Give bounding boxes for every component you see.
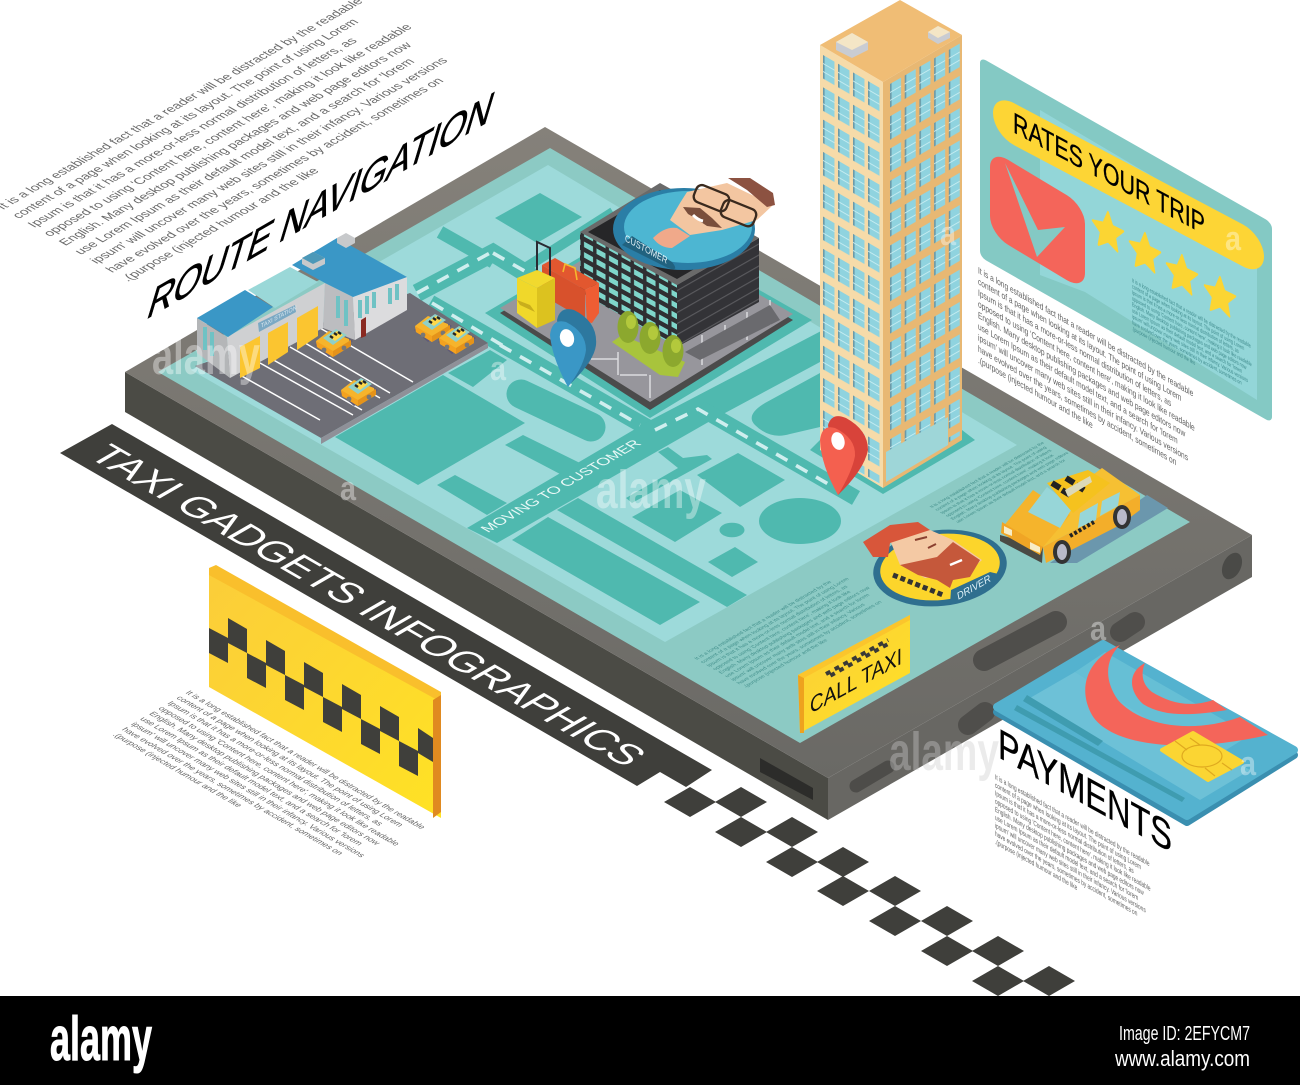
watermarks: a bbox=[1240, 745, 1257, 783]
image id: Image ID: 2EFYCM7 bbox=[1119, 1023, 1250, 1045]
website: www.alamy.com bbox=[1114, 1046, 1250, 1071]
panel small text: have evolved over the years, sometimes by accident, sometimes on bbox=[1132, 319, 1242, 387]
handle bbox=[537, 242, 550, 278]
screen small text: near call taxi: It is a long established fact that a reader will be distracted by the bbox=[694, 580, 834, 661]
watermarks: a bbox=[1225, 220, 1242, 258]
screen small text: near call taxi: ipsum' will uncover many web sites still in their infancy. Various bbox=[730, 603, 867, 682]
screen small text: near call taxi bbox=[694, 572, 896, 689]
roof checks bbox=[1052, 478, 1084, 495]
title band bbox=[60, 424, 712, 787]
roof bbox=[1047, 470, 1110, 513]
garage doors bbox=[240, 336, 260, 378]
card chip bbox=[1162, 733, 1242, 780]
base plaza bbox=[500, 230, 793, 410]
driver badge bbox=[863, 522, 1011, 613]
screen small text: near car: opposed to using 'Content here, content here', making it look bbox=[944, 453, 1055, 518]
city blocks bbox=[335, 375, 525, 485]
road: moving to customer bbox=[467, 330, 823, 543]
checks bbox=[893, 575, 943, 595]
hood bbox=[1002, 490, 1070, 547]
panel small text: opposed to using 'Content here, content here', making it look like readable bbox=[1132, 295, 1252, 369]
road: upper bbox=[417, 253, 545, 293]
building walls bbox=[197, 318, 230, 378]
taxi plate lorem text bbox=[111, 689, 430, 873]
screen small text: near call taxi: English. Many desktop publishing packages and web page editors now bbox=[718, 586, 872, 675]
yellow taxi bbox=[1000, 468, 1168, 564]
device speaker bbox=[760, 758, 813, 800]
rating lorem text: content of a page when looking at its layout. The point of using Lorem bbox=[978, 275, 1181, 403]
tick bbox=[1005, 163, 1065, 257]
payments lorem text: content of a page when looking at its layout. The point of using Lorem bbox=[995, 781, 1141, 872]
title text: TAXI GADGETS INFOGRAPHICS bbox=[79, 439, 656, 772]
stars bbox=[1093, 207, 1235, 319]
rating panel bbox=[980, 57, 1272, 423]
taxi plate lorem text: content of a page when looking at its layout. The point of using Lorem bbox=[174, 694, 406, 828]
screen small text: near call taxi: use Lorem Ipsum as their default model text, and a search for lorem bbox=[724, 593, 872, 679]
screen small text: near call taxi: have evolved over the years, sometimes by accident, sometimes on bbox=[736, 600, 884, 686]
rates your trip text: RATES YOUR TRIP bbox=[1013, 106, 1205, 241]
screen small text: near car: Ipsum is that it has a more-or-less normal distribution of letters bbox=[939, 448, 1053, 515]
tower bbox=[810, 0, 975, 494]
payments lorem text: have evolved over the years, sometimes by accident, sometimes on bbox=[995, 830, 1138, 919]
panel small text: use Lorem Ipsum as their default model text, and a search for 'lorem bbox=[1132, 307, 1242, 376]
rating lorem text: use Lorem Ipsum as their default model text, and a search for 'lorem bbox=[978, 320, 1178, 446]
sign checks bbox=[826, 640, 888, 678]
trees and lawn bbox=[612, 311, 685, 377]
parking lot bbox=[195, 293, 488, 438]
luggage bbox=[517, 242, 599, 328]
taxi plate lorem text: opposed to using 'Content here, content here', making it look like readable bbox=[156, 705, 403, 847]
panel small text: .(purpose (injected humour and the like bbox=[1132, 325, 1195, 368]
screen small text: near call taxi: content of a page when looking at its layout. The point of using Lorem bbox=[700, 577, 851, 665]
card stripes bbox=[1023, 695, 1103, 746]
roof vents bbox=[302, 233, 355, 270]
headlights bbox=[1004, 526, 1040, 553]
checker strip bbox=[664, 787, 1075, 996]
rating lorem text: opposed to using 'Content here, content here', making it look like readable bbox=[978, 298, 1195, 434]
taxi station bbox=[195, 233, 488, 444]
taxi plate lorem text: It is a long established fact that a reader will be distracted by the readable bbox=[183, 689, 428, 831]
station sign: TAXI STATION bbox=[261, 305, 297, 330]
device screen bbox=[158, 148, 1190, 743]
parking lines bbox=[240, 328, 413, 420]
customer badge: CUSTOMER bbox=[625, 233, 667, 267]
payments lorem text: Ipsum is that it has a more-or-less normal distribution of letters, as bbox=[995, 790, 1134, 876]
screen small text: near call taxi: Ipsum is that it has a more-or-less normal distribution of letters, as bbox=[706, 585, 850, 668]
customer badge bbox=[613, 178, 775, 270]
panel inner bbox=[1040, 110, 1257, 400]
heading: route navigation lorem text bbox=[0, 0, 493, 284]
heading: route navigation: ROUTE NAVIGATION bbox=[142, 80, 501, 330]
screen small text: near call taxi: opposed to using 'Content here, content here', making it look like bbox=[712, 590, 853, 672]
payments lorem text: opposed to using 'Content here, content here', making it look like readable bbox=[995, 798, 1151, 894]
taxi plate bbox=[209, 565, 441, 818]
screen small text: near car: It is a long established fact that a reader will be distracted by the bbox=[929, 441, 1046, 509]
alamy logo: alamy bbox=[50, 1005, 152, 1074]
rating lorem text: It is a long established fact that a reader will be distracted by the readable bbox=[978, 264, 1194, 399]
rating lorem text bbox=[978, 264, 1195, 490]
panel small text: ipsum' will uncover many web sites still in their infancy. Various versions bbox=[1132, 313, 1248, 385]
rating lorem text: .(purpose (injected humour and the like bbox=[978, 354, 1093, 431]
screen small text: near car: content of a page when looking at its layout. The point of using bbox=[934, 445, 1048, 512]
watermarks: a bbox=[490, 350, 507, 388]
customer face bbox=[653, 178, 775, 248]
tower base bbox=[810, 430, 975, 494]
left wall bbox=[580, 232, 677, 347]
heading: route navigation lorem text: content of a page when looking at its layout. The point of using Lorem bbox=[8, 16, 362, 221]
footer bar bbox=[0, 996, 1300, 1085]
roof taxi lamp bbox=[1065, 476, 1092, 497]
blue pin bbox=[550, 309, 596, 387]
red rounded square bbox=[990, 149, 1085, 291]
watermarks bbox=[152, 215, 1257, 783]
panel small text bbox=[1132, 277, 1252, 399]
panel small text: content of a page when looking at its layout. The point of using Lorem bbox=[1132, 283, 1244, 353]
side checker bbox=[1070, 522, 1094, 536]
lower paths bbox=[591, 300, 770, 398]
windshield bbox=[1028, 487, 1073, 528]
heading: route navigation lorem text: .(purpose (injected humour and the like bbox=[117, 165, 322, 284]
rating lorem text: have evolved over the years, sometimes by accident, sometimes on bbox=[978, 343, 1177, 468]
device side button bbox=[856, 767, 888, 786]
taxi plate lorem text: English. Many desktop publishing packages and web page editors now bbox=[147, 710, 384, 847]
plate checker bbox=[209, 618, 433, 776]
driver head bbox=[863, 522, 982, 588]
payments lorem text: ipsum' will uncover many web sites still in their infancy. Various versions bbox=[995, 822, 1146, 915]
red suitcase bbox=[542, 258, 599, 290]
taxi plate lorem text: ipsum' will uncover many web sites still in their infancy. Various versions bbox=[129, 720, 368, 859]
roofs bbox=[197, 290, 273, 337]
panel small text: Ipsum is that it has a more-or-less normal distribution of letters, as bbox=[1132, 289, 1239, 356]
rating lorem text: English. Many desktop publishing packages and web page editors now bbox=[978, 309, 1186, 440]
watermarks: alamy bbox=[596, 460, 706, 520]
device body bbox=[125, 127, 1252, 820]
device camera bbox=[1218, 550, 1246, 582]
card red arcs bbox=[1085, 645, 1268, 745]
station windows bbox=[205, 284, 397, 356]
watermarks: alamy bbox=[889, 722, 999, 782]
driver label bbox=[950, 572, 1003, 604]
map bbox=[191, 165, 1017, 642]
payments lorem text: .(purpose (injected humour and the like bbox=[995, 838, 1078, 893]
screen small text: near call taxi: .(purpose (injected humour and the like bbox=[742, 638, 830, 689]
wheels bbox=[1053, 540, 1071, 564]
call taxi label: CALL TAXI bbox=[810, 644, 902, 720]
front bbox=[1000, 535, 1043, 563]
roof bbox=[580, 183, 759, 285]
credit card bbox=[997, 644, 1294, 822]
screen small text: near car bbox=[929, 439, 1075, 524]
yellow suitcase bbox=[517, 270, 555, 288]
screen small text: near car: English. Many desktop publishing packages and web page editors bbox=[949, 451, 1070, 521]
payments lorem text: It is a long established fact that a reader will be distracted by the readable bbox=[995, 773, 1150, 869]
taxi plate lorem text: .(purpose (injected humour and the like bbox=[111, 731, 245, 809]
parked taxis bbox=[315, 314, 476, 406]
device pill buttons bbox=[984, 622, 1056, 660]
side windows bbox=[1078, 503, 1098, 528]
driver badge: DRIVER bbox=[956, 573, 992, 603]
rating lorem text: Ipsum is that it has a more-or-less normal distribution of letters, as bbox=[978, 287, 1171, 409]
payments lorem text: use Lorem Ipsum as their default model text, and a search for 'lorem bbox=[995, 814, 1138, 903]
right wall bbox=[677, 238, 759, 347]
heading: route navigation lorem text: use Lorem Ipsum as their default model text, and a search for 'lorem bbox=[71, 56, 418, 257]
taxi plate lorem text: have evolved over the years, sometimes by accident, sometimes on bbox=[120, 726, 346, 857]
heading: route navigation lorem text: Ipsum is that it has a more-or-less normal distribution of letters, as bbox=[24, 35, 360, 230]
card light panel bbox=[1030, 672, 1250, 800]
route dashes bbox=[417, 253, 830, 485]
payments lorem text: English. Many desktop publishing packages and web page editors now bbox=[995, 806, 1144, 898]
heading: route navigation lorem text: opposed to using 'Content here, content here', making it look like readable bbox=[39, 21, 415, 239]
heading: route navigation lorem text: ipsum' will uncover many web sites still in their infancy. Various versions bbox=[86, 55, 451, 266]
watermarks: alamy bbox=[152, 326, 260, 386]
shadow bbox=[1050, 495, 1168, 563]
heading: route navigation lorem text: have evolved over the years, sometimes by accident, sometimes on bbox=[102, 75, 447, 275]
red pin bbox=[820, 416, 868, 495]
watermarks: a bbox=[1090, 610, 1107, 648]
left wall bbox=[820, 45, 883, 488]
watermarks: a bbox=[340, 470, 357, 508]
payments heading: PAYMENTS bbox=[998, 719, 1172, 862]
call taxi sign bbox=[798, 615, 910, 733]
panel small text: It is a long established fact that a reader will be distracted by the readable bbox=[1132, 277, 1251, 350]
heading: route navigation lorem text: English. Many desktop publishing packages and web page editors now bbox=[55, 39, 416, 248]
rear body side bbox=[1043, 495, 1140, 563]
customer building bbox=[500, 178, 793, 410]
taxi plate lorem text: use Lorem Ipsum as their default model text, and a search for 'lorem bbox=[138, 715, 366, 847]
screen small text: near car: use Lorem Ipsum as their default model text, and a search for bbox=[955, 458, 1067, 524]
rating lorem text: ipsum' will uncover many web sites still in their infancy. Various versions bbox=[978, 331, 1188, 463]
taxi plate lorem text: Ipsum is that it has a more-or-less normal distribution of letters, as bbox=[165, 699, 386, 827]
right wall bbox=[883, 35, 962, 488]
watermarks: a bbox=[940, 215, 957, 253]
roof bbox=[820, 0, 962, 82]
yellow pill bbox=[993, 92, 1264, 278]
moving to customer label: MOVING TO CUSTOMER bbox=[478, 438, 646, 535]
panel small text: English. Many desktop publishing packages and web page editors now bbox=[1132, 301, 1247, 372]
payments lorem text bbox=[995, 773, 1151, 934]
